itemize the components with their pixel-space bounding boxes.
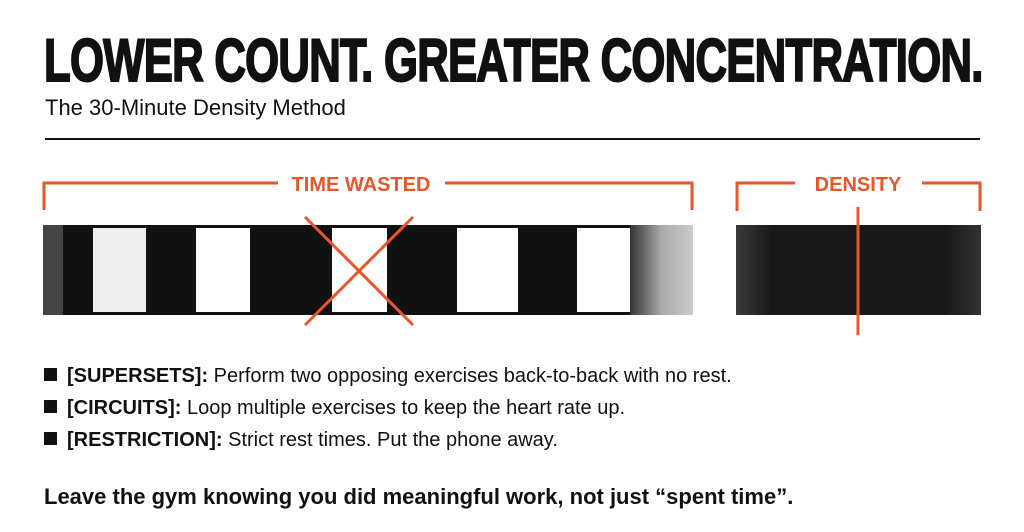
subtitle: The 30-Minute Density Method <box>45 95 346 120</box>
bullet: supersets: [SUPERSETS]: Perform two opposing exercises back-to-back with no rest. <box>67 365 732 387</box>
bracket: density: DENSITY <box>815 174 902 196</box>
bullet: restriction: [RESTRICTION]: Strict rest times. Put the phone away. <box>67 429 558 451</box>
bar: density <box>736 225 981 315</box>
bracket: density <box>737 174 980 211</box>
icon: cross <box>305 217 413 325</box>
closing statement: Leave the gym knowing you did meaningful work, not just “spent time”. <box>44 484 793 509</box>
bullet list <box>44 365 732 451</box>
chart: time wasted vs density <box>42 174 982 335</box>
bar: time wasted segments <box>43 225 693 315</box>
title: LOWER COUNT. GREATER CONCENTRATION. <box>44 27 983 94</box>
marker line <box>856 207 860 335</box>
bracket: time wasted: TIME WASTED <box>292 174 430 196</box>
bullet: circuits: [CIRCUITS]: Loop multiple exercises to keep the heart rate up. <box>67 397 625 419</box>
bracket: time wasted <box>44 174 692 210</box>
